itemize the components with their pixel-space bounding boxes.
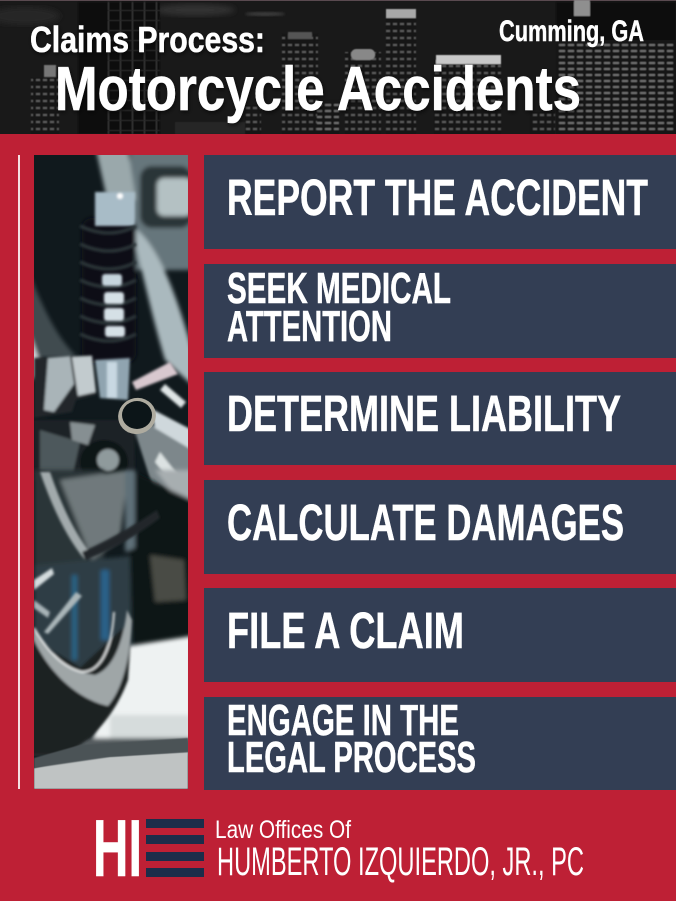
panel: engage in the legal process: ENGAGE IN THE [227,696,459,745]
panel: determine liability [204,372,676,465]
muffler opening [118,398,156,434]
heading: motorcycle accidents: Motorcycle Accidents [55,55,581,124]
heading: claims process: Claims Process: [30,19,265,60]
firm name [215,816,584,884]
asphalt [34,738,188,789]
panel: file a claim: FILE A CLAIM [227,602,464,659]
panel: engage in the legal process [204,696,676,790]
logo mark: HI with bars: HI [93,804,142,894]
header title [30,15,644,124]
panel: seek medical attention [204,264,676,358]
panel: engage in the legal process: LEGAL PROCESS [227,733,476,782]
white vertical rule [18,155,20,789]
footer logo [93,804,584,894]
panel: file a claim [204,588,676,682]
header: city skyline photo [0,0,676,134]
panel: seek medical attention: ATTENTION [227,302,392,351]
tyre [30,610,132,755]
firm name: Law Offices Of [215,816,351,844]
panel: calculate damages [204,480,676,574]
ground and background [30,636,192,754]
photo: motorcycle rear wheel [30,150,192,789]
panel: seek medical attention: SEEK MEDICAL [227,264,451,313]
panel: report the accident [204,155,676,249]
